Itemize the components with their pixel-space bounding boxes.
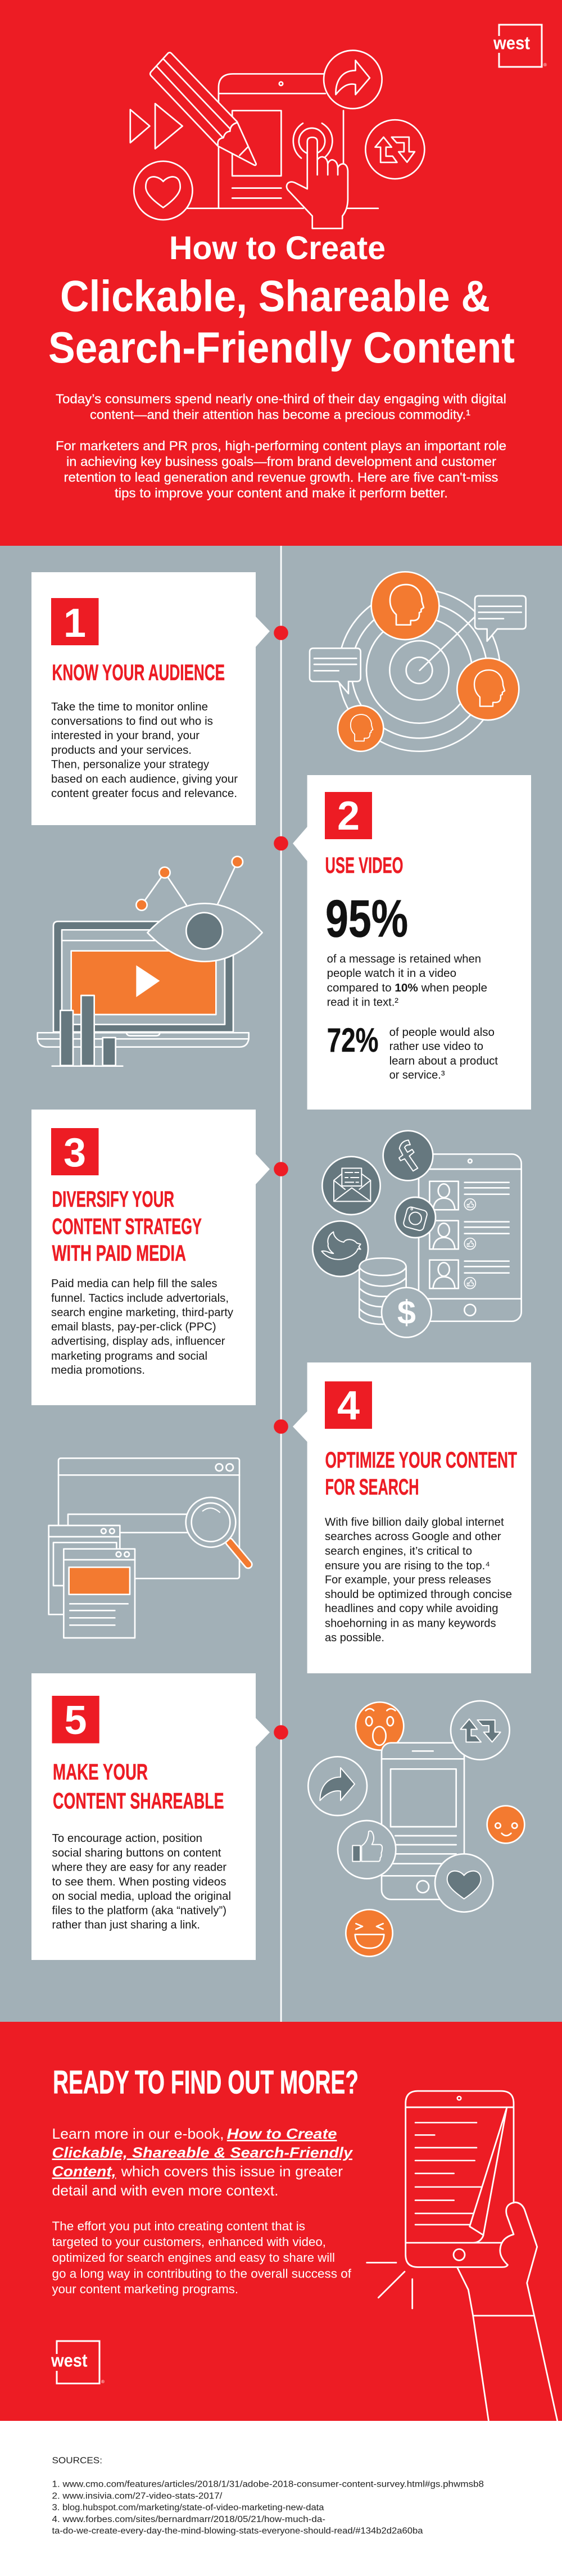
body text tip 4: as possible. bbox=[325, 1631, 384, 1644]
intro text: tips to improve your content and make it perform better. bbox=[115, 486, 448, 500]
heading: use video: USE VIDEO bbox=[325, 853, 404, 878]
heading: optimize your content for search bbox=[325, 1448, 517, 1500]
heading: make your content shareable: MAKE YOUR bbox=[53, 1760, 148, 1785]
text: e-book promotion: detail and with even more context. bbox=[52, 2182, 279, 2199]
stat text: 72% bbox=[389, 1026, 498, 1081]
body text tip 4 bbox=[325, 1516, 512, 1644]
number badge 3 bbox=[51, 1128, 99, 1175]
icon: hand holding tablet bbox=[367, 2091, 558, 2421]
panel: tip 1 know your audience bbox=[31, 572, 270, 825]
number badge 2: 2 bbox=[337, 794, 360, 839]
text: e-book promotion: Learn more in our e-book, bbox=[52, 2125, 224, 2142]
number badge 1: 1 bbox=[64, 601, 86, 646]
body text tip 3: email blasts, pay-per-click (PPC) bbox=[51, 1320, 216, 1333]
body text tip 1: Take the time to monitor online bbox=[51, 700, 208, 713]
timeline dot 1 bbox=[274, 626, 288, 640]
body text tip 5 bbox=[52, 1832, 231, 1931]
stat text: 72%: or service.³ bbox=[389, 1069, 445, 1081]
stat text: 95%: read it in text.² bbox=[327, 996, 398, 1008]
logo: west (top) bbox=[493, 25, 547, 67]
title: How to Create bbox=[169, 230, 386, 266]
number badge 4 bbox=[325, 1382, 372, 1429]
heading: ready to find out more: READY TO FIND OUT MORE? bbox=[53, 2064, 359, 2101]
text: closing paragraph: go a long way in contributing to the overall success of bbox=[52, 2266, 352, 2281]
body text tip 1: conversations to find out who is bbox=[51, 715, 213, 728]
body text tip 5: files to the platform (aka “natively”) bbox=[52, 1904, 226, 1917]
heading: make your content shareable bbox=[53, 1760, 224, 1814]
body text tip 3: media promotions. bbox=[51, 1364, 145, 1377]
panel: red header bbox=[0, 0, 562, 546]
body text tip 5: on social media, upload the original bbox=[52, 1890, 231, 1903]
body text tip 3: funnel. Tactics include advertorials, bbox=[51, 1292, 229, 1305]
heading: make your content shareable: CONTENT SHAREABLE bbox=[53, 1789, 224, 1814]
panel: tip 2 use video bbox=[293, 775, 531, 1110]
icon: laptop with video, bar chart and eye bbox=[38, 857, 262, 1066]
body text tip 3: search engine marketing, third-party bbox=[51, 1306, 234, 1319]
body text tip 1: interested in your brand, your bbox=[51, 729, 200, 742]
text: closing paragraph bbox=[52, 2219, 352, 2296]
intro text: Today’s consumers spend nearly one-third of their day engaging with digital bbox=[56, 391, 506, 406]
body text tip 1: content greater focus and relevance. bbox=[51, 787, 237, 800]
timeline dot 3 bbox=[274, 1162, 288, 1176]
stat: 95%: 95% bbox=[325, 889, 408, 948]
icon: smartphone with reactions and emoji bbox=[308, 1701, 524, 1957]
stat text: 95%: compared to 10% when people bbox=[327, 981, 487, 994]
sources: 4. www.forbes.com/sites/bernardmarr/2018/05/21/how-much-da- bbox=[52, 2515, 325, 2524]
sources: 1. www.cmo.com/features/articles/2018/1/31/adobe-2018-consumer-content-survey.html#gs.phwmsb8 bbox=[52, 2480, 484, 2489]
heading: diversify your content strategy with paid media: CONTENT STRATEGY bbox=[52, 1214, 202, 1239]
number badge 5 bbox=[52, 1696, 99, 1744]
body text tip 4: headlines and copy while avoiding bbox=[325, 1602, 498, 1615]
body text tip 4: search engines, it’s critical to bbox=[325, 1545, 472, 1558]
stat text: 72%: learn about a product bbox=[389, 1054, 498, 1067]
panel: gray tips background with timeline bbox=[0, 546, 562, 2022]
logo: west (bottom) bbox=[51, 2341, 105, 2384]
icon: audience target with heads and speech bubbles bbox=[310, 572, 526, 751]
body text tip 1 bbox=[51, 700, 238, 800]
timeline dot 2 bbox=[274, 836, 288, 850]
text: closing paragraph: optimized for search engines and easy to share will bbox=[52, 2251, 335, 2265]
logo: west (top): west bbox=[493, 33, 530, 53]
number badge 2 bbox=[325, 792, 372, 839]
logo: west (bottom): ® bbox=[101, 2379, 105, 2384]
number badge 5: 5 bbox=[64, 1698, 87, 1743]
panel: red call to action bbox=[0, 2022, 562, 2421]
body text tip 5: To encourage action, position bbox=[52, 1832, 202, 1845]
text: e-book promotion bbox=[52, 2125, 353, 2199]
title: Clickable, Shareable & bbox=[60, 271, 490, 320]
body text tip 3: Paid media can help fill the sales bbox=[51, 1277, 217, 1290]
text: e-book promotion: How to Create bbox=[227, 2125, 337, 2142]
heading: diversify your content strategy with paid media: WITH PAID MEDIA bbox=[52, 1241, 186, 1266]
text: e-book promotion: which covers this issue in greater bbox=[121, 2163, 343, 2180]
heading: know your audience: KNOW YOUR AUDIENCE bbox=[52, 660, 225, 685]
body text tip 4: searches across Google and other bbox=[325, 1530, 501, 1543]
body text tip 3: marketing programs and social bbox=[51, 1350, 207, 1362]
number badge 4: 4 bbox=[337, 1383, 360, 1428]
text: e-book promotion: Content, bbox=[52, 2163, 116, 2180]
logo: west (bottom): west bbox=[51, 2351, 88, 2371]
icon: tablet feed with social media circles and coins: $ bbox=[397, 1293, 416, 1331]
panel: tip 5 make content shareable bbox=[31, 1673, 270, 1960]
sources: 2. www.insivia.com/27-video-stats-2017/ bbox=[52, 2491, 223, 2501]
body text tip 4: shoehorning in as many keywords bbox=[325, 1617, 496, 1630]
sources: 3. blog.hubspot.com/marketing/state-of-video-marketing-new-data bbox=[52, 2503, 324, 2512]
body text tip 5: to see them. When posting videos bbox=[52, 1875, 226, 1888]
intro text: For marketers and PR pros, high-performing content plays an important role bbox=[56, 438, 506, 453]
body text tip 4: ensure you are rising to the top.⁴ bbox=[325, 1559, 490, 1572]
title bbox=[48, 230, 515, 372]
text: closing paragraph: The effort you put into creating content that is bbox=[52, 2219, 305, 2233]
body text tip 1: based on each audience, giving your bbox=[51, 772, 238, 785]
icon: tablet, pencil, tapping hand and social buttons bbox=[130, 51, 424, 228]
body text tip 1: Then, personalize your strategy bbox=[51, 758, 210, 771]
stat: 72%: 72% bbox=[327, 1021, 379, 1059]
logo: west (top): ® bbox=[543, 62, 547, 67]
intro text bbox=[56, 391, 506, 500]
stat text: 95%: of a message is retained when bbox=[327, 952, 481, 966]
stat text: 95% bbox=[327, 952, 487, 1008]
body text tip 4: For example, your press releases bbox=[325, 1573, 491, 1586]
icon: browser windows with magnifying glass bbox=[49, 1458, 248, 1638]
stat text: 72%: rather use video to bbox=[389, 1040, 483, 1053]
body text tip 5: rather than just sharing a link. bbox=[52, 1918, 200, 1931]
title: Search-Friendly Content bbox=[48, 323, 515, 372]
timeline dot 5 bbox=[274, 1725, 288, 1740]
body text tip 4: With five billion daily global internet bbox=[325, 1516, 504, 1529]
sources: SOURCES: bbox=[52, 2456, 102, 2466]
body text tip 5: social sharing buttons on content bbox=[52, 1846, 221, 1859]
text: closing paragraph: targeted to your customers, enhanced with video, bbox=[52, 2235, 326, 2249]
panel: tip 4 optimize for search bbox=[293, 1362, 531, 1673]
timeline dot 4 bbox=[274, 1419, 288, 1434]
panel: tip 3 diversify content strategy bbox=[31, 1110, 270, 1405]
sources: ta-do-we-create-every-day-the-mind-blowing-stats-everyone-should-read/#134b2d2a60ba bbox=[52, 2527, 423, 2536]
stat text: 95%: people watch it in a video bbox=[327, 967, 456, 980]
number badge 3: 3 bbox=[64, 1130, 86, 1175]
text: closing paragraph: your content marketing programs. bbox=[52, 2282, 238, 2296]
intro text: retention to lead generation and revenue growth. Here are five can't-miss bbox=[64, 470, 498, 485]
heading: optimize your content for search: FOR SEARCH bbox=[325, 1475, 419, 1500]
body text tip 3: advertising, display ads, influencer bbox=[51, 1335, 225, 1348]
number badge 1 bbox=[51, 598, 99, 646]
body text tip 4: should be optimized through concise bbox=[325, 1588, 512, 1601]
intro text: in achieving key business goals—from brand development and customer bbox=[66, 454, 496, 469]
text: e-book promotion: Clickable, Shareable & Search-Friendly bbox=[52, 2144, 353, 2161]
sources bbox=[52, 2456, 484, 2536]
body text tip 1: products and your services. bbox=[51, 744, 192, 757]
stat text: 72%: of people would also bbox=[389, 1026, 495, 1039]
icon: tablet feed with social media circles and coins bbox=[312, 1131, 522, 1337]
heading: diversify your content strategy with paid media: DIVERSIFY YOUR bbox=[52, 1187, 174, 1212]
heading: diversify your content strategy with paid media bbox=[52, 1187, 202, 1266]
body text tip 5: where they are easy for any reader bbox=[52, 1861, 226, 1874]
intro text: content—and their attention has become a precious commodity.¹ bbox=[90, 407, 470, 422]
body text tip 3 bbox=[51, 1277, 234, 1377]
